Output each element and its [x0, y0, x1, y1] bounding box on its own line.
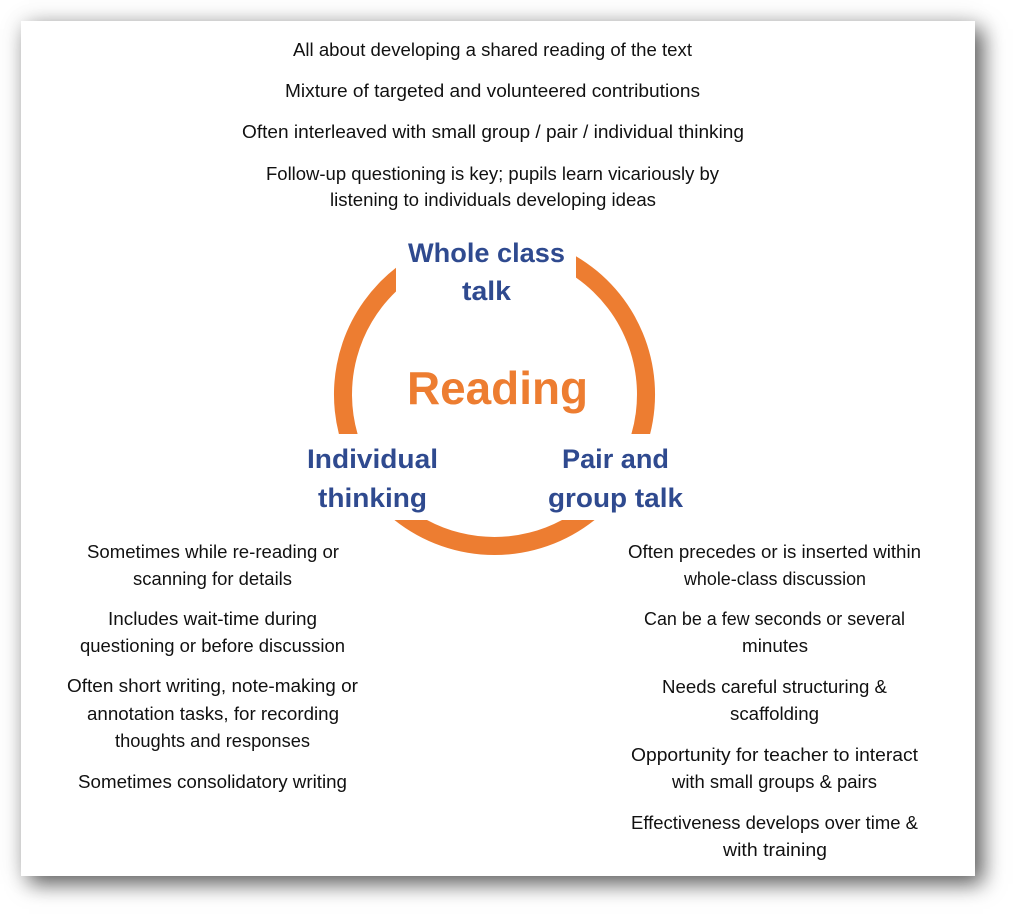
text block: pair and group talk notes: Can be a few seconds or several [644, 609, 905, 629]
heading: Pair and group talk [548, 444, 683, 513]
cycle ring: three orange arc segments [334, 256, 655, 555]
text block: pair and group talk notes: whole-class discussion [683, 569, 866, 589]
text block: whole class talk notes: listening to individuals developing ideas [330, 190, 656, 210]
text block: whole class talk notes: Mixture of targeted and volunteered contributions [285, 81, 700, 101]
text block: individual thinking notes: Sometimes consolidatory writing [78, 772, 347, 792]
text block: pair and group talk notes [628, 542, 921, 860]
arc: individual thinking to whole class talk [334, 268, 396, 434]
text block: individual thinking notes: Sometimes while re-reading or [87, 542, 339, 562]
heading: Individual thinking: thinking [318, 483, 427, 513]
heading: Whole class talk: Whole class [408, 238, 565, 268]
heading: Whole class talk: talk [462, 276, 511, 306]
text block: pair and group talk notes: with training [722, 840, 827, 860]
text block: individual thinking notes [67, 542, 358, 792]
heading: Pair and group talk: Pair and [562, 444, 669, 474]
text block: whole class talk notes: Often interleaved with small group / pair / individual thinking [242, 122, 744, 142]
text block: individual thinking notes: Includes wait-time during [108, 609, 317, 629]
text block: whole class talk notes [242, 40, 744, 210]
heading: Pair and group talk: group talk [548, 483, 683, 513]
text block: individual thinking notes: Often short writing, note-making or [67, 676, 358, 696]
text block: pair and group talk notes: Often precedes or is inserted within [628, 542, 921, 562]
text block: whole class talk notes: Follow-up questioning is key; pupils learn vicariously by [266, 164, 719, 184]
text block: individual thinking notes: questioning or before discussion [80, 636, 345, 656]
text block: pair and group talk notes: scaffolding [730, 704, 819, 724]
text block: pair and group talk notes: minutes [742, 636, 808, 656]
text block: whole class talk notes: All about developing a shared reading of the text [293, 40, 692, 60]
arc: top right to pair and group talk [576, 256, 655, 434]
text block: pair and group talk notes: with small groups & pairs [671, 772, 877, 792]
heading: Whole class talk [408, 238, 565, 306]
text block: individual thinking notes: scanning for details [133, 569, 292, 589]
arc: bottom between individual thinking and pair and group talk [394, 520, 595, 555]
text block: pair and group talk notes: Needs careful structuring & [662, 677, 887, 697]
text block: pair and group talk notes: Effectiveness develops over time & [631, 813, 918, 833]
centre title: Reading: Reading [407, 362, 588, 414]
text block: individual thinking notes: thoughts and responses [115, 731, 310, 751]
text block: pair and group talk notes: Opportunity for teacher to interact [631, 745, 918, 765]
text block: individual thinking notes: annotation tasks, for recording [87, 704, 339, 724]
heading: Individual thinking [307, 444, 438, 513]
heading: Individual thinking: Individual [307, 444, 438, 474]
